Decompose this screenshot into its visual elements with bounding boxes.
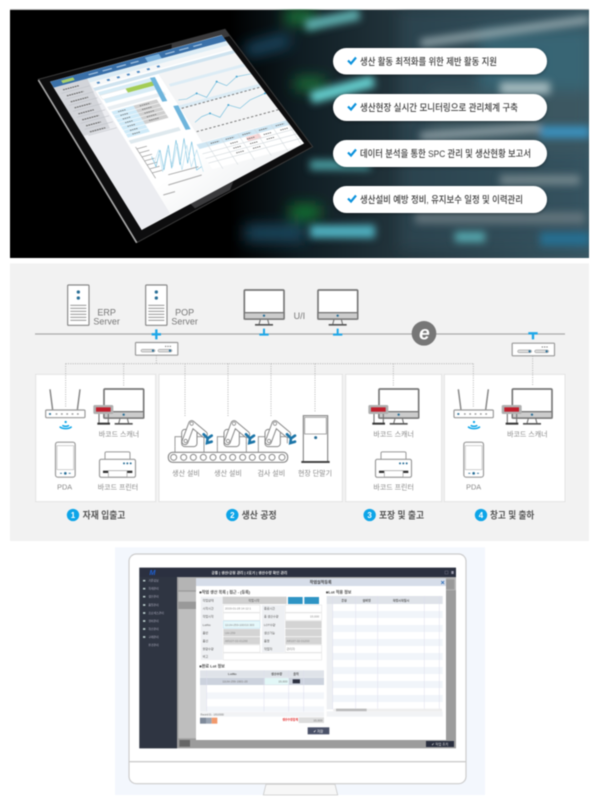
heading: step 4: 창고 및 출하 [490, 510, 534, 522]
network backbone line [35, 332, 565, 336]
section 3 devices: 바코드 프린터 [373, 482, 414, 491]
feature pill 1 [333, 48, 547, 74]
heading: step 3 [363, 509, 424, 522]
modal dialog: 작업실적등록 [310, 578, 332, 584]
modal dialog: Record 01 - 1/01/0000 [201, 713, 225, 716]
feature pill 2 [333, 94, 547, 121]
lot table: LotNo [228, 672, 237, 676]
sidebar: 기준정보 [148, 579, 159, 583]
panel: hero banner with tablet [10, 9, 590, 258]
form: 2019-01-28 14:12:1 [225, 607, 251, 611]
form: 종료시간 [264, 606, 275, 611]
tablet lower table [196, 120, 304, 168]
top bar [139, 568, 456, 577]
form: 품명 [264, 638, 270, 643]
sidebar: 품질관리 [148, 603, 159, 607]
form: AR107-02-01200 [287, 639, 310, 643]
sidebar: 프로세스관리 [148, 611, 164, 615]
lot table: 15,000 [278, 680, 288, 684]
heading: step 1: 1 [71, 511, 76, 520]
panel: section 1 box [36, 374, 156, 502]
connector: blue tee [528, 333, 538, 339]
ERP server: Server [93, 317, 120, 327]
feature pill 4 [333, 186, 547, 213]
tablet device [38, 29, 314, 243]
heading: step 2: 생산 공정 [242, 510, 277, 522]
tablet data table [111, 99, 173, 138]
ERP server: ERP [97, 307, 116, 317]
tablet sidebar [84, 84, 169, 228]
modal dialog [196, 578, 446, 740]
modal dialog: 생산수량합계 [282, 717, 298, 721]
save button: ✔ 저장 [313, 728, 323, 733]
screen application [139, 568, 456, 748]
modal dialog: ✕ [440, 580, 445, 587]
network switch left [135, 342, 178, 355]
section 1 devices [46, 389, 144, 491]
section 4 devices: PDA [466, 482, 481, 491]
POP server: POP [175, 307, 194, 317]
save button [308, 727, 329, 734]
section 2 site terminal: 현장 단말기 [298, 468, 332, 477]
section 4 devices [454, 389, 552, 491]
heading: step 1 [67, 509, 125, 522]
heading: step 3: 포장 및 출고 [379, 511, 424, 522]
sidebar: 생산관리 [148, 595, 159, 599]
bottom-right action button: ✔ 작업 조치 [432, 741, 448, 746]
form: UH-259 [225, 631, 236, 635]
sidebar: 자재관리 [148, 587, 159, 591]
POP server: Server [171, 317, 198, 327]
panel: section 3 box [346, 374, 442, 502]
panel: network diagram [10, 263, 589, 541]
section 1 devices: 바코드 프린터 [98, 482, 138, 491]
form: LotNo [203, 623, 211, 627]
form [201, 597, 322, 660]
heading: step 2 [226, 509, 277, 522]
form: 총 생산수량 [264, 614, 279, 619]
section 2 production line: 생산 설비 [172, 468, 200, 477]
form: 작업자 [264, 646, 272, 651]
section 2 production line [168, 422, 295, 477]
lot apply table [327, 596, 443, 717]
section 4 devices: 바코드 스캐너 [507, 430, 548, 439]
top bar: 공통 | 생산/공정 관리 | 2호기 | 생산수량 확인 관리 [211, 570, 287, 575]
lot table [200, 670, 324, 712]
section 3 devices [368, 389, 419, 491]
form: 작업상태 [203, 598, 214, 603]
form: 작업시작 [248, 598, 260, 603]
heading: step 4: 4 [479, 511, 484, 520]
feature pill 1: 생산 활동 최적화를 위한 제반 활동 지원 [360, 56, 497, 68]
table buttons [200, 718, 217, 724]
form: 비고 [203, 654, 208, 659]
dotted connection lines [66, 355, 533, 416]
UI monitors [244, 290, 358, 335]
heading: step 4 [475, 509, 534, 522]
heading: step 3: 3 [367, 511, 372, 520]
form: 관리자 [287, 646, 295, 651]
heading: step 1: 자재 입출고 [83, 510, 125, 522]
network switch right [512, 343, 554, 356]
form: 작업시작 [203, 614, 214, 619]
bottom-right action button [426, 741, 454, 747]
internet icon: e [419, 324, 430, 345]
feature pill 3: 데이터 분석을 통한 SPC 관리 및 생산현황 보고서 [360, 148, 531, 160]
form: 품선 [203, 638, 208, 643]
monitor stand [263, 784, 338, 795]
sidebar: 환경관리 [148, 643, 159, 647]
tablet line charts [151, 73, 265, 172]
lot apply table: 작업시작일시 [393, 597, 409, 602]
section 2 production line: 검사 설비 [258, 468, 285, 477]
form: 11UH-259-100/10.303 [225, 623, 255, 627]
POP server [146, 285, 198, 327]
section 1 devices: 바코드 스캐너 [99, 430, 139, 439]
section 2 site terminal [298, 416, 332, 477]
panel: section 2 box [159, 374, 342, 502]
section 3 devices: 바코드 스캐너 [373, 430, 414, 439]
form: 생산가능 [264, 630, 275, 635]
form: 시작시간 [203, 606, 214, 611]
modal dialog: 15,000 [313, 718, 323, 722]
sidebar [139, 577, 177, 748]
sidebar: 구매관리 [148, 635, 159, 639]
form: LOT수량 [264, 622, 276, 627]
feature pill 4: 생산설비 예방 정비, 유지보수 일정 및 이력관리 [360, 194, 523, 206]
lot apply table: 공정 [341, 597, 347, 602]
modal dialog: ■완료 Lot 정보 [199, 662, 225, 668]
feature pill 3 [333, 140, 547, 167]
section 1 devices: PDA [57, 482, 72, 491]
sidebar: 설비관리 [148, 619, 159, 623]
lot table: 출력 [293, 671, 299, 676]
feature pill 2: 생산현장 실시간 모니터링으로 관리체계 구축 [360, 102, 518, 114]
connector: blue cross [152, 329, 161, 339]
UI monitors: U/I [294, 311, 305, 321]
top bar: M [149, 568, 156, 577]
form: 15,000 [310, 615, 319, 619]
hero background [10, 9, 590, 258]
internet icon [412, 321, 436, 346]
form: 불량수량 [203, 646, 214, 651]
heading: step 2: 2 [230, 511, 235, 520]
section 2 production line: 생산 설비 [214, 468, 242, 477]
sidebar: 자산관리 [148, 627, 159, 631]
ERP server [68, 285, 120, 327]
modal dialog: ■Lot 적용 정보 [326, 588, 352, 594]
form: AR107-02-01200 [225, 639, 248, 643]
lot table: 11UH-259-1901-20 [222, 680, 248, 684]
panel: section 4 box [444, 374, 565, 502]
lot table: 생산수량 [271, 671, 282, 676]
panel: monitor with work-record screen [115, 547, 485, 795]
lot apply table: 설비명 [363, 597, 371, 602]
modal dialog: ■작업 생산 목록 | 접근 - (등록) [199, 588, 251, 594]
form: 품번 [203, 630, 208, 635]
monitor body [129, 554, 466, 784]
